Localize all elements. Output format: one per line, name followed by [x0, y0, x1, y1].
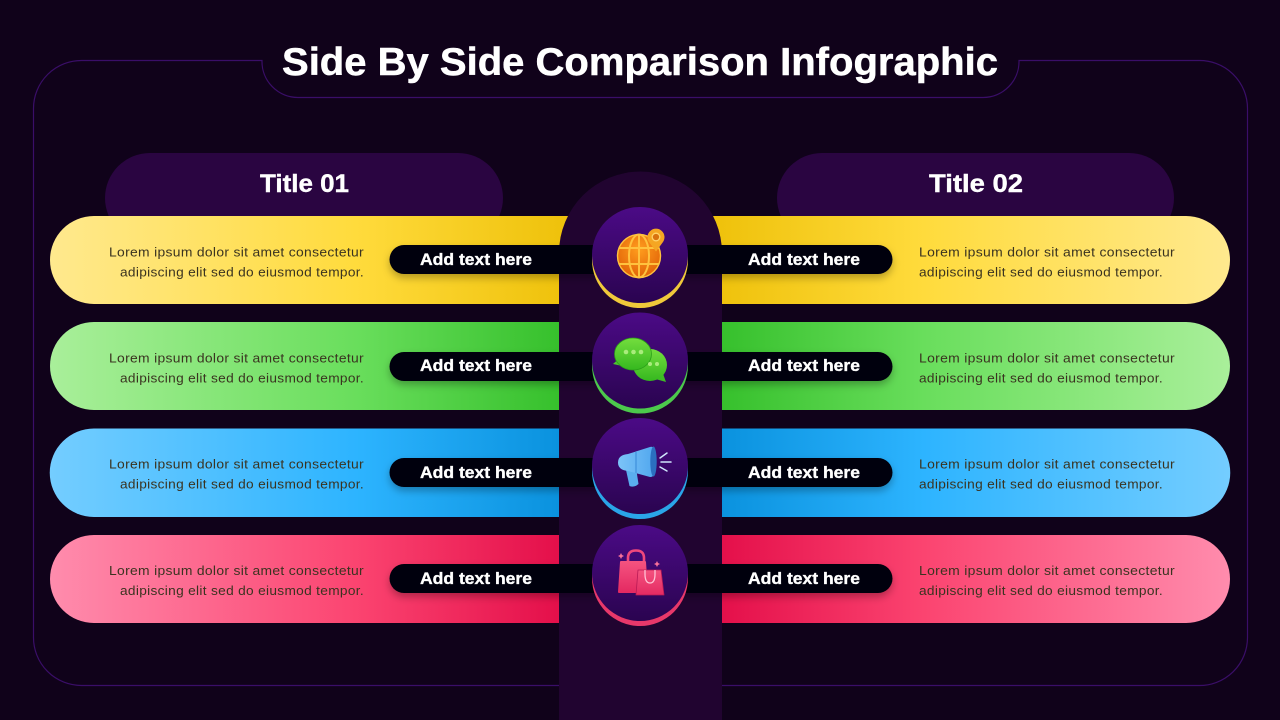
row 2 left label pill — [390, 352, 600, 381]
row 4 bars: pink — [50, 535, 1230, 623]
row 3 right text — [919, 456, 1175, 492]
row 4 right text — [919, 563, 1175, 598]
row 3 left label pill — [390, 458, 600, 487]
row 2 right text — [919, 350, 1175, 386]
header: Title 01: Title 01 — [260, 170, 349, 198]
icon disc 3: megaphone — [592, 418, 688, 519]
row 3 left text: Lorem ipsum dolor sit amet consectetur — [109, 456, 364, 472]
row 2 left text: adipiscing elit sed do eiusmod tempor. — [120, 370, 364, 386]
header: Title 01 — [105, 153, 503, 243]
row 4 left label pill: Add text here — [420, 570, 532, 588]
row 3 right label pill — [680, 458, 892, 487]
title: Side By Side Comparison Infographic — [282, 41, 998, 84]
header: Title 02: Title 02 — [929, 170, 1023, 198]
row 4 left text — [109, 563, 364, 598]
row 1 bars: yellow — [50, 216, 1230, 304]
row 2 right label pill — [680, 352, 892, 381]
row 4 right label pill — [680, 564, 892, 593]
row 2 left text — [109, 350, 364, 386]
row 1 right text: adipiscing elit sed do eiusmod tempor. — [919, 264, 1163, 280]
row 1 left label pill — [390, 245, 600, 274]
row 1 left text: adipiscing elit sed do eiusmod tempor. — [120, 264, 364, 280]
row 1 left text: Lorem ipsum dolor sit amet consectetur — [109, 244, 364, 260]
row 3 bars: blue — [50, 428, 1230, 517]
header: Title 02 — [777, 153, 1174, 243]
row 1 right label pill — [680, 245, 892, 274]
row 1 right label pill: Add text here — [748, 251, 860, 269]
row 4 right text: Lorem ipsum dolor sit amet consectetur — [919, 563, 1175, 578]
row 2 left label pill: Add text here — [420, 357, 532, 375]
row 3 right text: Lorem ipsum dolor sit amet consectetur — [919, 456, 1175, 472]
row 1 right text — [919, 244, 1175, 280]
row 2 bars: green — [50, 322, 1230, 410]
row 2 right label pill: Add text here — [748, 357, 860, 375]
icon disc 1: globe with pin — [592, 207, 688, 308]
row 4 left text: Lorem ipsum dolor sit amet consectetur — [109, 563, 364, 578]
row 3 left label pill: Add text here — [420, 464, 532, 482]
icon disc 2: chat bubbles — [592, 312, 688, 414]
row 1 right text: Lorem ipsum dolor sit amet consectetur — [919, 244, 1175, 260]
center column — [559, 172, 722, 720]
row 3 left text: adipiscing elit sed do eiusmod tempor. — [120, 476, 364, 492]
row 4 left label pill — [390, 564, 600, 593]
row 1 left label pill: Add text here — [420, 251, 532, 269]
row 4 left text: adipiscing elit sed do eiusmod tempor. — [120, 583, 364, 598]
row 3 left text — [109, 456, 364, 492]
row 4 right text: adipiscing elit sed do eiusmod tempor. — [919, 583, 1163, 598]
row 1 left text — [109, 244, 364, 280]
icon disc 4: shopping bags — [592, 525, 688, 626]
row 3 right text: adipiscing elit sed do eiusmod tempor. — [919, 476, 1163, 492]
row 4 right label pill: Add text here — [748, 570, 860, 588]
row 2 right text: Lorem ipsum dolor sit amet consectetur — [919, 350, 1175, 366]
row 3 right label pill: Add text here — [748, 464, 860, 482]
row 2 left text: Lorem ipsum dolor sit amet consectetur — [109, 350, 364, 366]
row 2 right text: adipiscing elit sed do eiusmod tempor. — [919, 370, 1163, 386]
